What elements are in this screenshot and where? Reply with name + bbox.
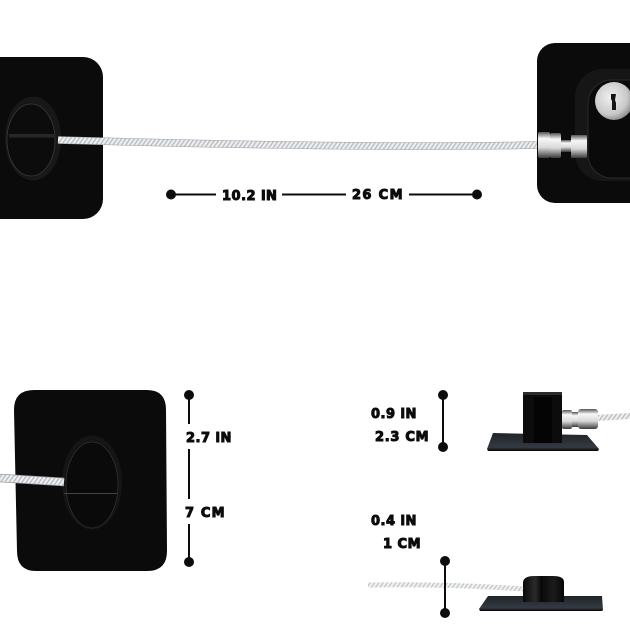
side view cable [596, 416, 630, 418]
icon: key cylinder [595, 82, 630, 120]
label: 2.7 in: 2.7 iN [186, 431, 232, 446]
side view anchor [368, 576, 603, 611]
cable connector [538, 132, 587, 158]
top right lock assembly [537, 43, 630, 203]
side view anchor cable [368, 585, 525, 589]
label: 10.2 in: 10.2 iN [222, 189, 277, 204]
top steel cable [58, 140, 540, 146]
depth dimension line [438, 390, 448, 452]
front view cable [0, 478, 64, 482]
label: 1 cm: 1 CM [383, 537, 421, 552]
label: 0.4 in: 0.4 iN [371, 514, 417, 529]
front view plate [0, 390, 167, 571]
label: 7 cm: 7 CM [185, 506, 225, 521]
thickness dimension line [440, 556, 450, 618]
side view lock [487, 392, 630, 451]
label: 26 cm: 26 CM [352, 188, 403, 203]
height dimension line [184, 390, 194, 567]
label: 2.3 cm: 2.3 CM [375, 430, 429, 445]
label: 0.9 in: 0.9 iN [371, 407, 417, 422]
top left mounting plate [0, 57, 103, 219]
width dimension line [166, 190, 482, 200]
